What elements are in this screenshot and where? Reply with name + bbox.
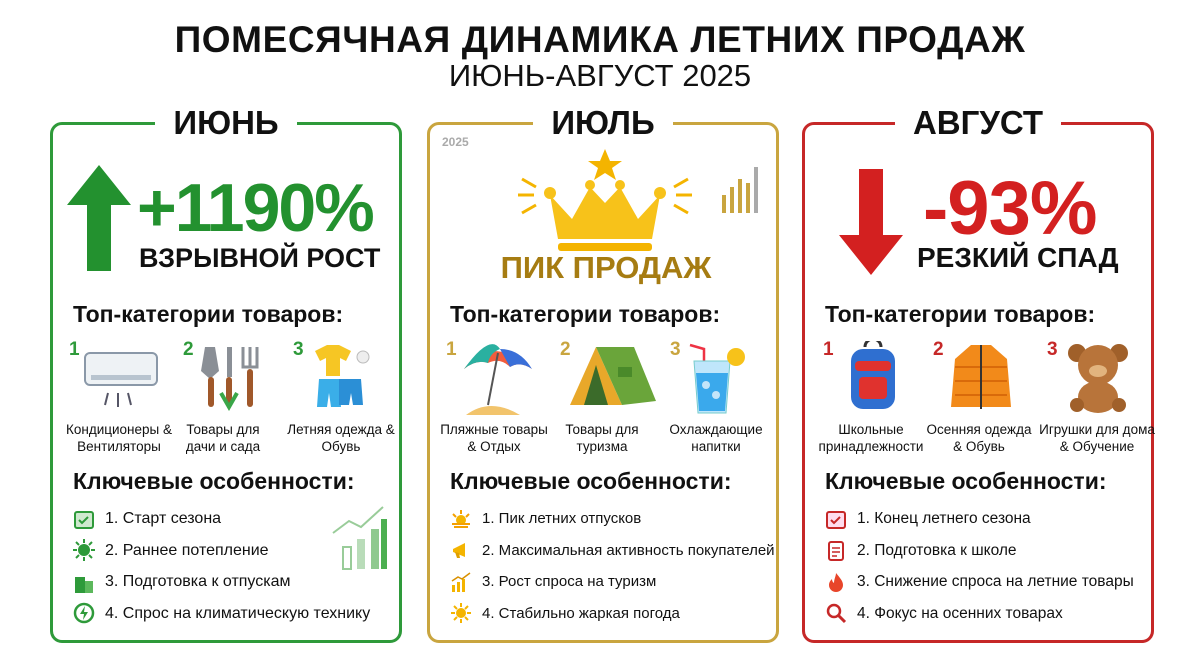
features list: 3. Подготовка к отпускам	[105, 573, 290, 590]
categories: Кондиционеры & Вентиляторы	[66, 422, 172, 454]
categories	[819, 339, 1155, 454]
features list: 4. Стабильно жаркая погода	[482, 604, 680, 622]
heading: key features: Ключевые особенности:	[450, 468, 732, 494]
icon: up arrow	[67, 165, 131, 271]
categories: Пляжные товары & Отдых	[440, 422, 548, 454]
features list: 2. Подготовка к школе	[857, 542, 1017, 558]
heading: top categories: Топ-категории товаров:	[450, 301, 720, 327]
features list	[826, 510, 1134, 623]
title: ПОМЕСЯЧНАЯ ДИНАМИКА ЛЕТНИХ ПРОДАЖ	[175, 19, 1025, 60]
icon: crown	[518, 149, 692, 251]
features list: 3. Снижение спроса на летние товары	[857, 573, 1134, 590]
categories: Игрушки для дома & Обучение	[1039, 422, 1155, 454]
features list: 4. Фокус на осенних товарах	[857, 604, 1063, 622]
features list: 4. Спрос на климатическую технику	[105, 604, 370, 622]
panel: august	[802, 122, 1154, 643]
panel: july	[427, 122, 779, 643]
heading: key features: Ключевые особенности:	[825, 468, 1106, 494]
heading: top categories: Топ-категории товаров:	[825, 301, 1095, 327]
heading: july: ИЮЛЬ	[551, 104, 655, 141]
categories: 3	[1047, 339, 1058, 360]
heading: june: ИЮНЬ	[173, 104, 279, 141]
categories: Школьные принадлежности	[819, 422, 923, 454]
categories: 2	[933, 339, 944, 360]
icon: bars	[722, 167, 758, 213]
heading: august: АВГУСТ	[913, 104, 1043, 141]
icon: down arrow	[839, 169, 903, 275]
big number: +1190%	[137, 170, 373, 246]
panel: june	[50, 122, 402, 643]
categories: 2	[183, 339, 194, 360]
categories: Товары для дачи и сада	[186, 422, 260, 454]
categories: Товары для туризма	[565, 422, 639, 454]
categories	[66, 339, 395, 454]
categories: 3	[293, 339, 304, 360]
features list: 1. Старт сезона	[105, 510, 221, 527]
categories: Осенняя одежда & Обувь	[927, 422, 1031, 454]
features list: 2. Максимальная активность покупателей	[482, 542, 775, 558]
subtitle: ИЮНЬ-АВГУСТ 2025	[449, 58, 751, 93]
features list: 2. Раннее потепление	[105, 542, 269, 558]
categories: 3	[670, 339, 681, 360]
categories	[440, 339, 763, 454]
features list: 1. Пик летних отпусков	[482, 510, 641, 527]
categories: 1	[823, 339, 834, 360]
categories: 1	[69, 339, 80, 360]
subheading: ВЗРЫВНОЙ РОСТ	[139, 243, 380, 273]
features list: 3. Рост спроса на туризм	[482, 573, 656, 590]
heading: top categories: Топ-категории товаров:	[73, 301, 343, 327]
big number: -93%	[923, 166, 1096, 251]
features list: 1. Конец летнего сезона	[857, 510, 1031, 527]
features list	[451, 510, 775, 623]
panel: july: 2025	[442, 135, 469, 149]
categories: Летняя одежда & Обувь	[287, 422, 395, 454]
subheading: РЕЗКИЙ СПАД	[917, 242, 1119, 273]
icon: growth chart	[332, 506, 387, 570]
heading: key features: Ключевые особенности:	[73, 468, 354, 494]
categories: 2	[560, 339, 571, 360]
categories: 1	[446, 339, 457, 360]
categories: Охлаждающие напитки	[669, 422, 763, 454]
features list	[73, 510, 370, 624]
subheading: ПИК ПРОДАЖ	[501, 250, 711, 285]
